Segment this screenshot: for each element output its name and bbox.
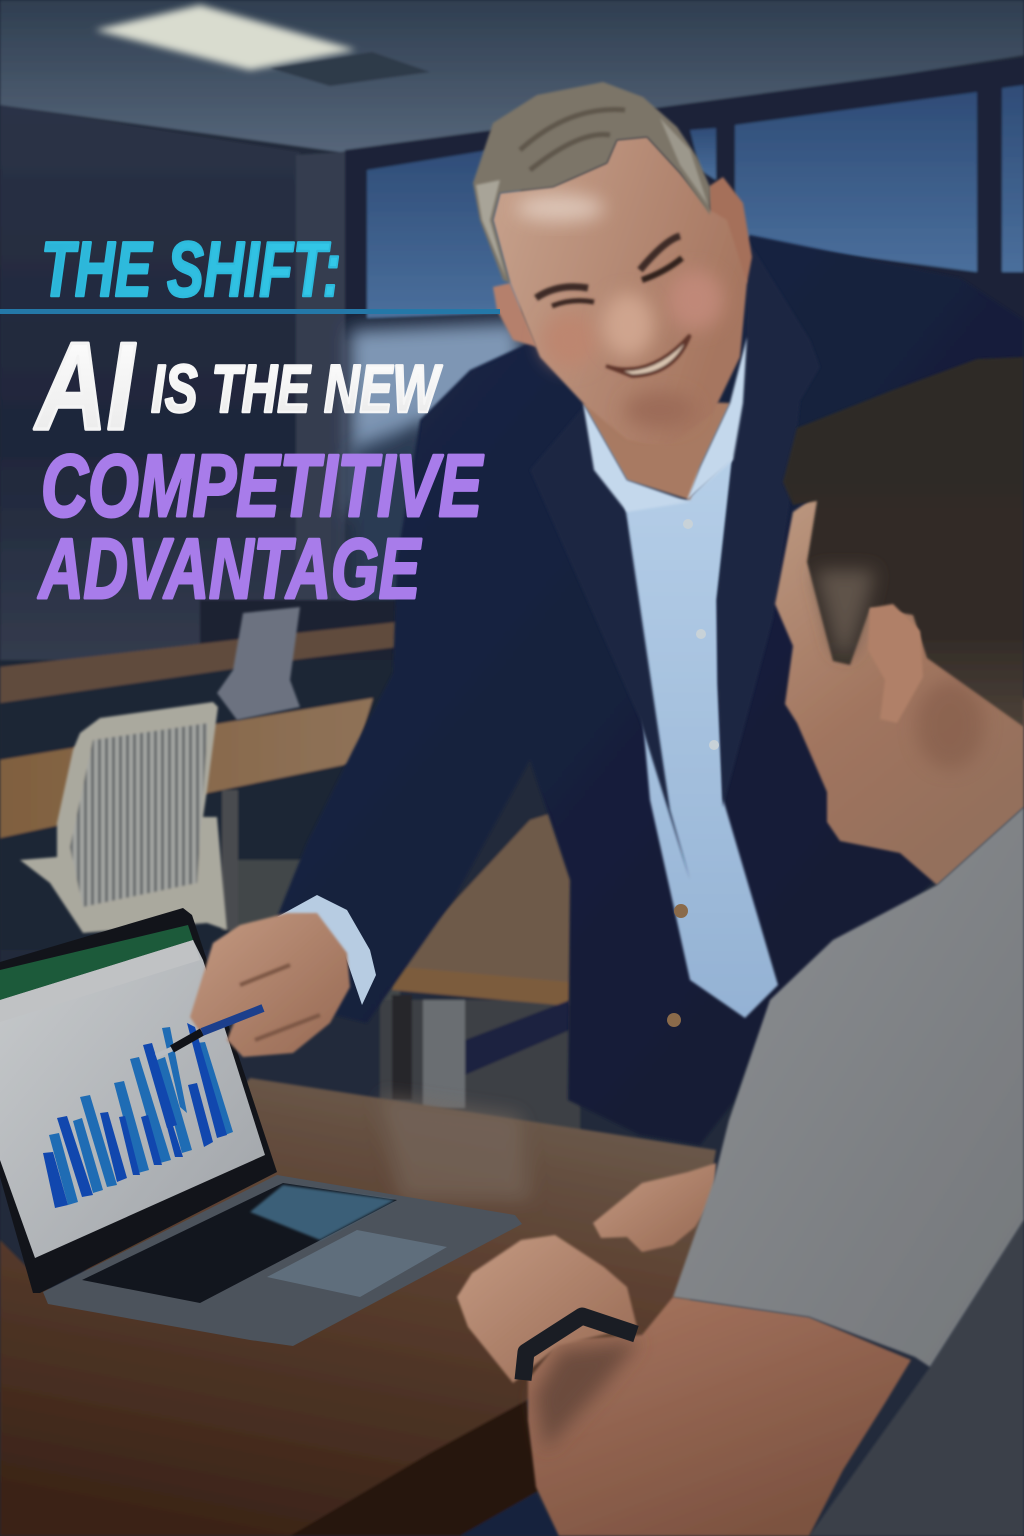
heading: AI: AI [34, 318, 136, 456]
ear right [708, 177, 752, 283]
chair: mesh front [20, 702, 227, 933]
laptop [0, 908, 522, 1346]
t-shirt body shadow [809, 1220, 1024, 1536]
face shading [516, 194, 723, 428]
ribbon [0, 925, 193, 1000]
neck [583, 400, 730, 500]
hand pointing with pen [156, 913, 350, 1057]
collar [583, 337, 747, 512]
shirt cuff [277, 895, 376, 1005]
wrist hair shading [535, 1340, 640, 1450]
table [0, 1078, 716, 1536]
laptop base [43, 1175, 522, 1346]
buttons [667, 519, 719, 1027]
heading: advantage: ADVANTAGE [38, 522, 422, 617]
face and neck [775, 495, 1024, 885]
hair [473, 82, 710, 283]
hand [457, 1235, 637, 1383]
hair [783, 357, 1024, 727]
jacket [277, 235, 1024, 1145]
lapels [530, 240, 820, 880]
presenter hand on table [593, 1163, 716, 1252]
sideburn fade [815, 570, 875, 655]
t-shirt sleeve [673, 807, 1024, 1367]
seated man in grey t-shirt [457, 357, 1024, 1536]
pen [156, 1008, 263, 1056]
watch [523, 1316, 636, 1380]
chair: back row [217, 607, 300, 720]
bars: back series [49, 1027, 233, 1205]
right desk [395, 805, 578, 1005]
forearm [528, 1297, 911, 1536]
presenter: man in navy blazer [277, 82, 1024, 1145]
screen [0, 940, 265, 1258]
heading: the shift: THE SHIFT: [41, 225, 341, 313]
ear left [493, 283, 537, 347]
heading: is the new: IS THE NEW [151, 351, 443, 427]
back desk [0, 622, 397, 703]
laptop lid [0, 908, 277, 1293]
face [493, 137, 747, 447]
hand [190, 913, 350, 1057]
bar chart [43, 1023, 233, 1208]
title [0, 225, 500, 617]
neck shadow behind ear [916, 681, 984, 769]
eyes, brows and mouth [536, 236, 690, 376]
keyboard [82, 1183, 397, 1303]
rule under heading [0, 309, 500, 314]
trackpad [267, 1230, 447, 1297]
finger shading [240, 965, 320, 1040]
chairs [20, 607, 300, 933]
middle desk [0, 698, 373, 838]
bars: front series [43, 1023, 227, 1208]
shirt [590, 447, 778, 1018]
ear [868, 604, 923, 723]
heading: competitive: COMPETITIVE [41, 436, 484, 535]
